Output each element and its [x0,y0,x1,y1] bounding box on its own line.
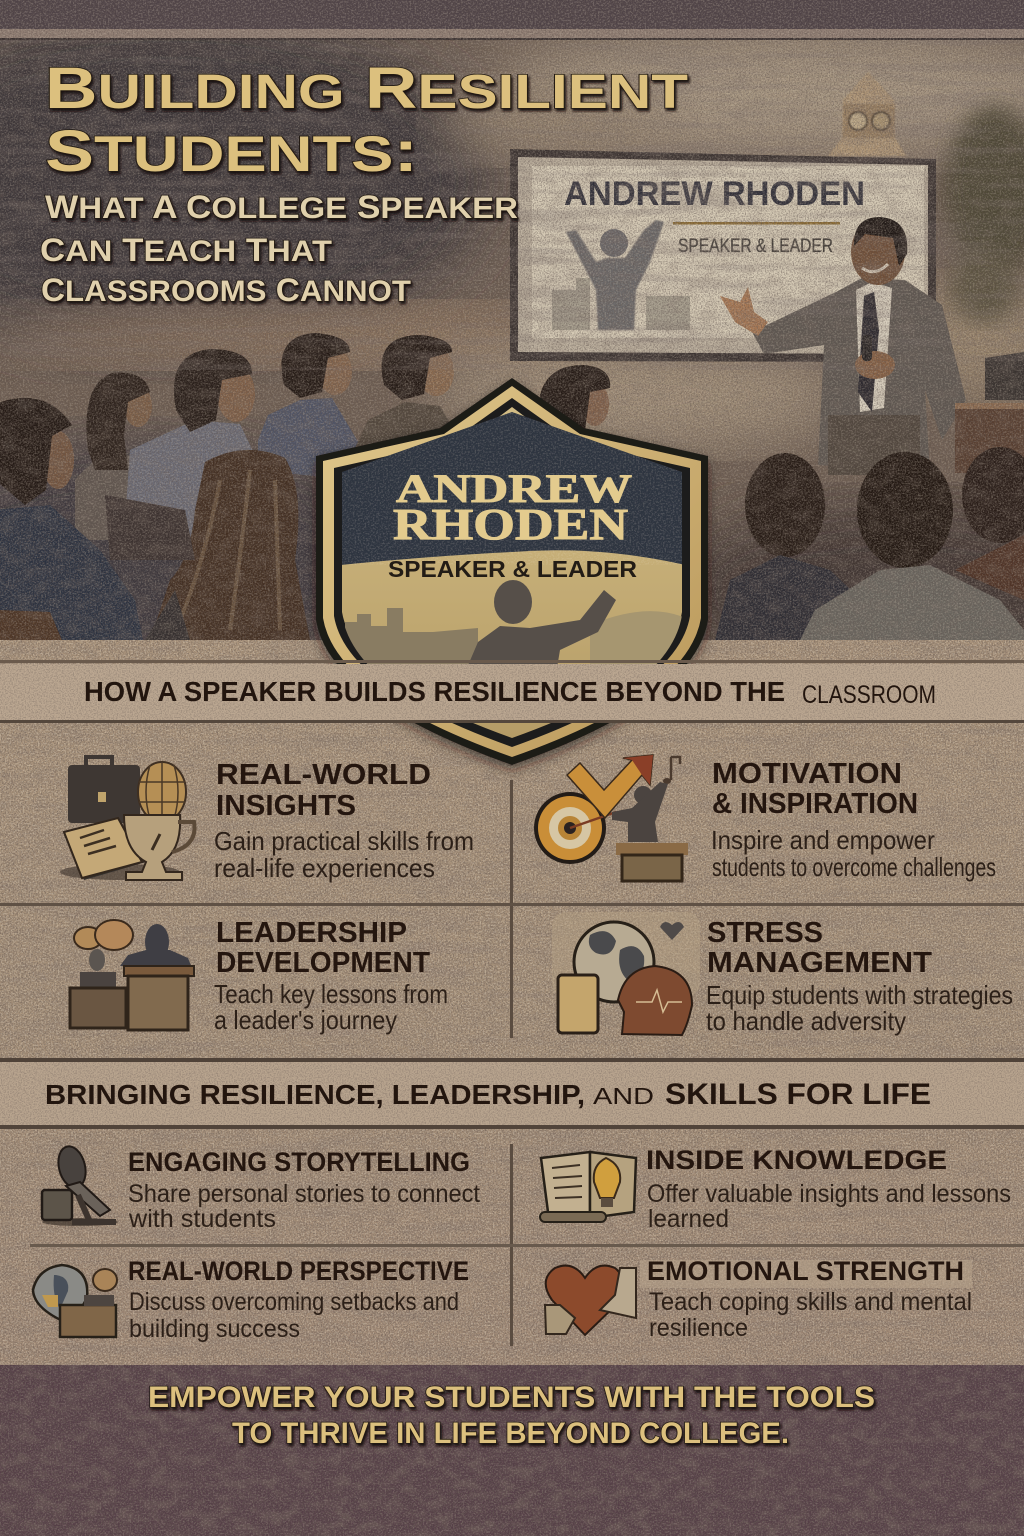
heading: STRESS [707,917,823,949]
footer call to action [148,1381,875,1450]
panel: real-world perspective [33,1256,469,1343]
icon: microphone [42,1143,118,1226]
panel: real-world insights: real-life experiences [214,853,435,883]
title: BUILDING R ESILIENT [45,56,688,121]
section band 1: CLASSROOM [802,681,936,709]
student: foreground left man [0,398,145,650]
subtitle [40,189,518,308]
description: Teach key lessons from [214,979,448,1009]
panel: motivation and inspiration: & INSPIRATION [712,788,918,820]
tree [945,105,1024,323]
description: Inspire and empower [711,825,935,855]
student: rear left [75,372,152,540]
panel: stress management: to handle adversity [706,1006,906,1036]
title [45,56,688,184]
footer band [0,1365,1024,1536]
icon: target, arrow, podium [534,755,688,881]
heading: ENGAGING STORYTELLING [128,1147,470,1177]
shield emblem [316,378,708,765]
shield navy field [342,412,682,565]
icon: globe, tablet, head with heartbeat [552,912,700,1035]
icon: globe and box [33,1265,117,1337]
section band 2: SKILLS FOR LIFE [665,1078,931,1111]
dividers: upper grid [0,780,1024,1062]
footer call to action: TO THRIVE IN LIFE BEYOND COLLEGE. [232,1417,789,1450]
speaker [720,217,966,475]
panel: stress management: MANAGEMENT [707,947,932,979]
student: man in brown [356,335,454,447]
panel: leadership development [70,917,448,1035]
heading: REAL-WORLD PERSPECTIVE [128,1256,469,1286]
student: woman in grey [126,349,255,538]
shield emblem: RHODEN [393,500,628,549]
hero illustration: lecture scene [0,40,1024,640]
subtitle: CAN TEACH THAT [40,232,332,268]
panel: inside knowledge: learned [648,1205,729,1233]
heading: bringing resilience: BRINGING RESILIENCE, LEADERSHIP, [45,1079,585,1110]
screen title: ANDREW RHODEN [564,175,865,213]
student: back row right [715,453,849,640]
panel: engaging storytelling: with students [128,1205,276,1233]
panel: motivation and inspiration [534,755,996,882]
top band [0,0,1024,41]
title: STUDENTS : [45,119,418,184]
shield silhouette [468,580,616,664]
student: long-haired woman [145,450,310,640]
scene sky and wall [0,40,1024,640]
audience [0,333,1024,650]
projection screen [510,149,936,362]
panel: emotional strength: resilience [649,1314,748,1342]
screen subtitle: SPEAKER & LEADER [678,236,833,257]
description: Offer valuable insights and lessons [647,1180,1011,1208]
icon: heart held by hands [545,1266,636,1335]
description: Teach coping skills and mental [649,1288,972,1316]
subtitle: WHAT A COLLEGE SPEAKER [45,189,518,225]
screen silhouette [552,220,690,330]
panel: stress management [552,912,1013,1036]
section band 2 [0,1062,1024,1129]
heading: REAL-WORLD [216,759,431,791]
panel: leadership development: a leader's journey [214,1005,397,1035]
footer call to action: EMPOWER YOUR STUDENTS WITH THE TOOLS [148,1381,875,1414]
description: Share personal stories to connect [128,1180,480,1208]
shield name: ANDREW [396,466,632,511]
student: behind shield [540,365,610,430]
icon: book and lightbulb [540,1152,636,1222]
section band 2: AND [593,1083,654,1109]
description: Gain practical skills from [214,826,474,856]
panel: inside knowledge [540,1145,1011,1233]
panel: emotional strength: EMOTIONAL STRENGTH [647,1256,964,1286]
heading [640,1260,972,1288]
heading: MOTIVATION [712,758,902,790]
subtitle: CLASSROOMS CANNOT [41,272,411,308]
student: back row far right [955,447,1024,600]
icon: briefcase globe trophy book [60,757,195,880]
panel: engaging storytelling [42,1143,480,1233]
panel: leadership development: DEVELOPMENT [216,947,430,979]
parchment lower panel [0,640,1024,1366]
student: man in grey-blue [258,333,360,480]
heading: INSIDE KNOWLEDGE [646,1145,947,1175]
heading: LEADERSHIP [216,917,407,949]
description: Discuss overcoming setbacks and [129,1288,459,1316]
icon: leader at podium with speech bubbles [70,920,194,1030]
student: back row centre right [795,452,1024,650]
dividers: lower grid [30,1144,1024,1346]
panel: real-world perspective: building success [129,1315,300,1343]
clock tower [828,72,906,156]
panel: real-world insights [60,757,474,883]
shield tagline: SPEAKER & LEADER [388,556,637,582]
shield skyline [345,608,478,664]
chair [0,495,195,640]
podium and laptop [955,352,1024,473]
panel: emotional strength [545,1256,972,1342]
panel: real-world insights: INSIGHTS [216,790,356,822]
section band 1 [0,660,1024,723]
heading: how a speaker builds resilience: HOW A SPEAKER BUILDS RESILIENCE BEYOND THE [84,676,785,707]
